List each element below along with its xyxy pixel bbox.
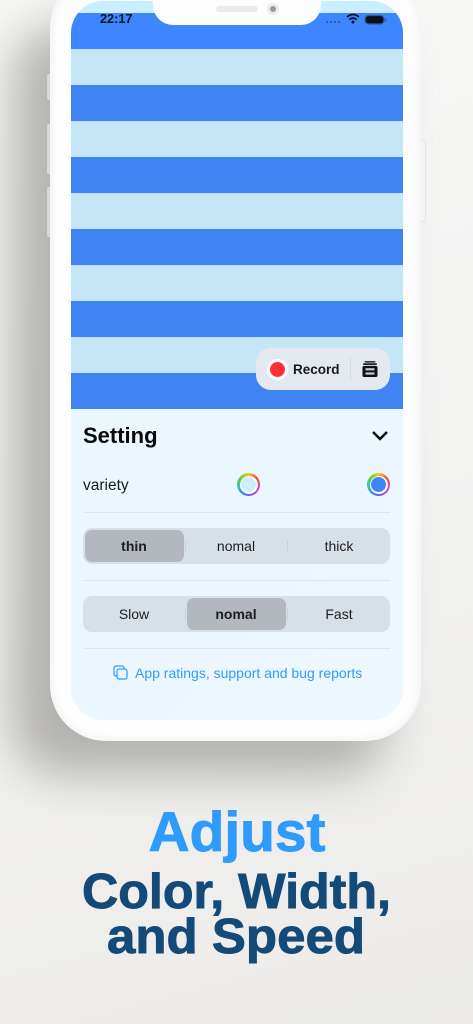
option: nomal: nomal — [217, 538, 255, 554]
link text: App ratings, support and bug reports — [135, 665, 362, 681]
colour swatch: blue — [367, 473, 390, 496]
notch — [153, 0, 321, 25]
record button — [267, 359, 288, 380]
title line: Color, Width,: Color, Width, — [82, 865, 391, 919]
option: slow: Slow — [119, 606, 149, 622]
record label: Record — [293, 362, 340, 377]
divider — [350, 357, 351, 381]
status bar icons — [326, 14, 386, 25]
option: thin: thin — [121, 538, 147, 554]
width segmented control — [83, 528, 390, 564]
camera — [267, 3, 279, 15]
option: thick: thick — [325, 538, 353, 554]
phone side button: right — [420, 140, 426, 222]
striped preview — [71, 1, 403, 409]
settings panel — [83, 423, 390, 681]
phone side button: left middle — [47, 124, 51, 174]
title line: and Speed: and Speed — [107, 910, 365, 964]
status bar time: 22:17 — [100, 12, 132, 26]
phone shadow — [12, 25, 387, 775]
icon: copy — [113, 665, 128, 680]
phone side button: left top — [47, 74, 51, 100]
phone screen — [71, 1, 403, 720]
option: nomal selected: nomal — [215, 606, 257, 622]
speaker — [216, 6, 258, 12]
phone side button: left bottom — [47, 187, 51, 237]
icon: chevron down — [372, 431, 388, 441]
colour swatch: light — [237, 473, 260, 496]
record control — [256, 348, 390, 390]
option: fast: Fast — [325, 606, 353, 622]
title line: Adjust: Adjust — [148, 800, 326, 863]
phone body — [50, 0, 421, 741]
icon: film stack — [362, 361, 378, 377]
variety label: variety — [83, 477, 129, 494]
support link — [113, 665, 362, 681]
setting heading: Setting — [83, 423, 158, 448]
speed segmented control — [83, 596, 390, 632]
title — [82, 800, 391, 964]
